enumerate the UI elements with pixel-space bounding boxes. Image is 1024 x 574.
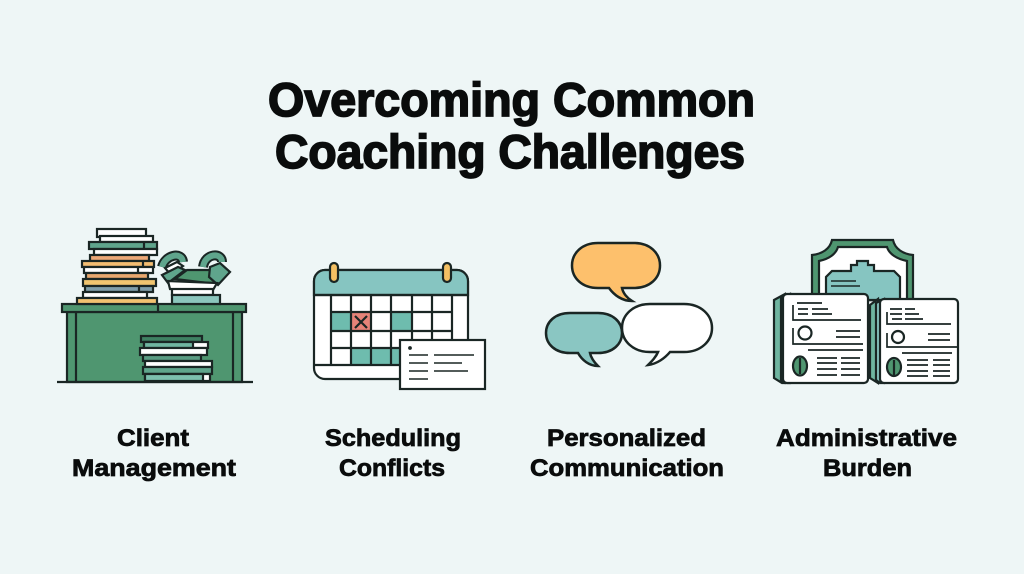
desk (57, 304, 253, 382)
book stack under desk (140, 336, 212, 381)
label: personalized communication: Communication (530, 455, 724, 482)
label: client management: Management (72, 455, 236, 482)
icon: calendar (314, 263, 485, 389)
label: scheduling conflicts (325, 425, 461, 482)
binder rings (330, 263, 451, 282)
label: personalized communication (530, 425, 724, 482)
orange bubble (572, 243, 660, 301)
title: Coaching Challenges (275, 125, 745, 178)
right document (870, 299, 958, 383)
label: personalized communication: Personalized (547, 425, 706, 452)
label: client management (72, 425, 236, 482)
icon: desk with books and locks (57, 229, 253, 382)
label: administrative burden: Burden (823, 455, 912, 482)
label: administrative burden: Administrative (776, 425, 957, 452)
teal bubble (546, 313, 622, 366)
icon: documents and clipboard (774, 240, 958, 383)
book stack on desk (77, 229, 157, 304)
label: scheduling conflicts: Conflicts (339, 455, 445, 482)
label: administrative burden (776, 425, 957, 482)
label: client management: Client (117, 425, 189, 452)
locks and tray (162, 255, 230, 304)
title (268, 73, 755, 178)
shield frame (812, 240, 913, 300)
title: Overcoming Common (268, 73, 755, 126)
white bubble (622, 304, 712, 365)
label: scheduling conflicts: Scheduling (325, 425, 461, 452)
highlighted days (331, 312, 412, 365)
note card (400, 340, 485, 389)
left document (774, 294, 868, 383)
clipboard (826, 261, 900, 300)
icon: speech bubbles (546, 243, 712, 366)
